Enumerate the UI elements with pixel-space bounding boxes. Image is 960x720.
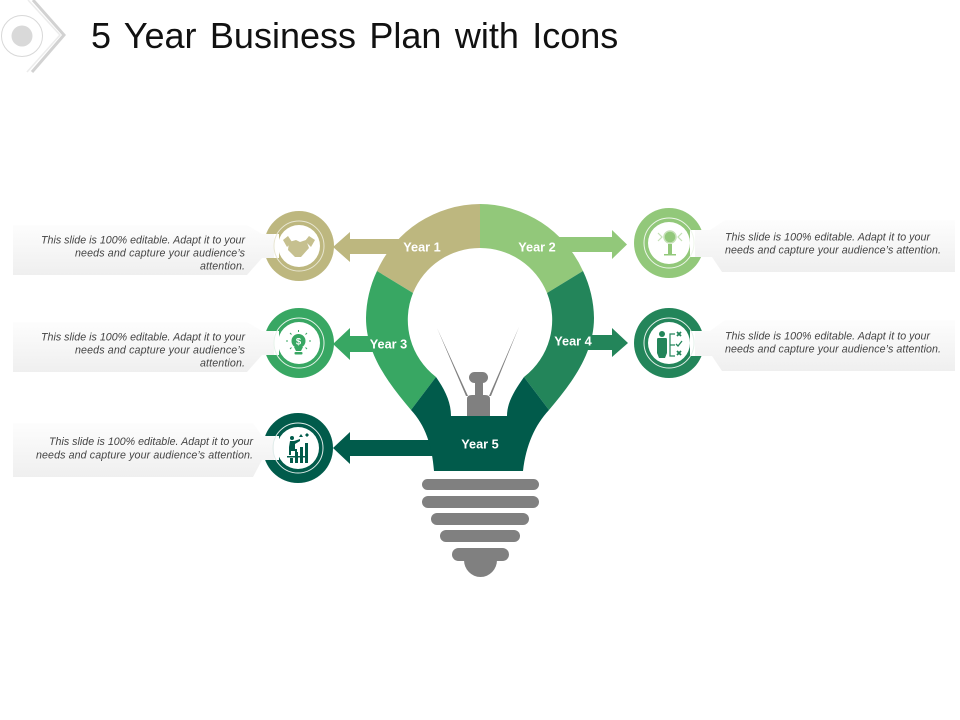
arrow: year 4 — [575, 328, 628, 357]
callout: year 2: This slide is 100% editable. Adapt it to your — [725, 232, 930, 244]
arrow: year 3 — [333, 328, 385, 360]
segment: year 4 — [524, 271, 594, 410]
arrow: year 5 — [333, 432, 450, 464]
year labels: Year 4 — [554, 334, 592, 348]
segment: year 3 — [366, 271, 436, 410]
badge: year 3 dollar bulb — [13, 308, 334, 378]
header emblem — [2, 0, 64, 72]
callout: year 1: needs and capture your audience’s — [75, 248, 246, 260]
callout: year 3 — [41, 332, 246, 370]
filament — [437, 327, 519, 416]
callout: year 3: attention. — [200, 358, 245, 370]
callout: year 4 — [725, 330, 941, 356]
badge: year 4 checklist — [634, 308, 955, 378]
callout: year 1: attention. — [200, 260, 245, 272]
segment: year 2 — [480, 204, 583, 293]
callout: year 1: This slide is 100% editable. Adapt it to your — [41, 234, 245, 246]
icon: magnifier — [658, 231, 682, 256]
callout: year 3: This slide is 100% editable. Adapt it to your — [41, 332, 245, 344]
arrow: year 2 — [540, 230, 627, 259]
title: 5 Year Business Plan with Icons — [91, 15, 618, 56]
icon: growth chart — [287, 433, 309, 463]
callout: year 1 — [41, 234, 246, 272]
bulb screw base — [422, 479, 539, 577]
icon: checklist person — [657, 331, 682, 358]
callout: year 5: needs and capture your audience’s attention. — [36, 450, 253, 462]
badge: year 2 magnifier — [634, 208, 955, 278]
icon: dollar bulb: $ — [296, 336, 302, 348]
callout: year 5: This slide is 100% editable. Adapt it to your — [49, 436, 253, 448]
year labels: Year 2 — [518, 240, 556, 254]
segment: year 1 — [377, 204, 480, 293]
arrow: year 1 — [333, 232, 420, 262]
callout: year 4: needs and capture your audience’s attention. — [725, 344, 941, 356]
segment: year 5 — [411, 377, 549, 471]
callout: year 4: This slide is 100% editable. Adapt it to your — [725, 330, 930, 342]
badge: year 5 growth chart — [13, 413, 333, 483]
year labels — [370, 240, 592, 452]
bulb glass segments — [366, 204, 594, 471]
icon: dollar bulb — [286, 330, 311, 354]
badge: year 1 handshake — [13, 211, 334, 281]
callout: year 2: needs and capture your audience’s attention. — [725, 244, 941, 256]
icon: handshake — [283, 236, 315, 257]
callout: year 2 — [725, 232, 941, 256]
year labels: Year 3 — [370, 338, 407, 352]
callout: year 5 — [36, 436, 253, 462]
callout: year 3: needs and capture your audience’s — [75, 344, 246, 356]
year labels: Year 1 — [403, 240, 441, 254]
year labels: Year 5 — [461, 438, 499, 452]
